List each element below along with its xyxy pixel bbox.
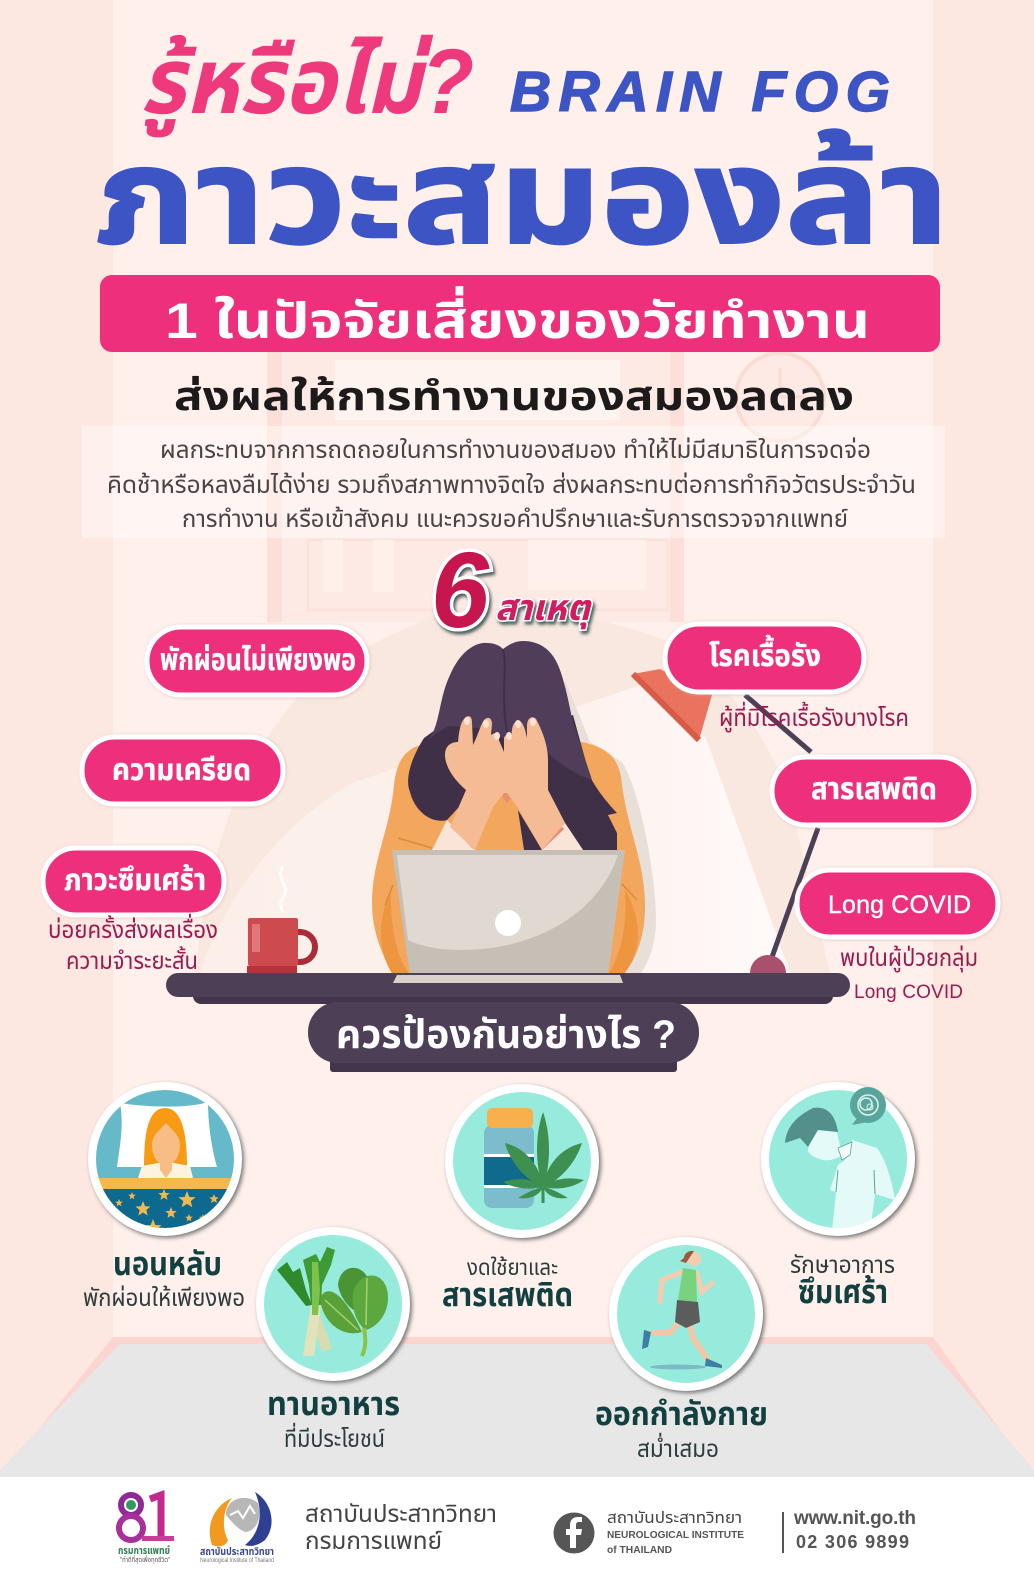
label: avoid drugs: งดใช้ยาและ [467, 1255, 558, 1280]
woman with head in hands [372, 641, 656, 975]
hair light [427, 641, 592, 780]
neck [497, 790, 520, 803]
desk lamp [633, 669, 818, 973]
label: avoid drugs [442, 1255, 573, 1313]
icon: vegetables [256, 1227, 412, 1383]
count badge: 6 causes [431, 529, 592, 650]
footer band [0, 1477, 1034, 1581]
woman shadow [560, 680, 656, 975]
pill: depression [43, 847, 226, 917]
label: sleep: พักผ่อนให้เพียงพอ [83, 1284, 245, 1312]
logo: department 81 years [118, 1495, 174, 1565]
pill: chronic disease: โรคเรื้อรัง [709, 634, 821, 673]
icon: runner [609, 1237, 765, 1393]
logo: neurological institute: สถาบันประสาทวิทยา [200, 1546, 274, 1558]
pill: not enough rest [147, 626, 369, 697]
left hand [445, 716, 504, 850]
footer: institute name [305, 1501, 497, 1555]
logo: department 81 years: กรมการแพทย์ [118, 1545, 170, 1557]
footer divider [782, 1512, 784, 1553]
pill: not enough rest: พักผ่อนไม่เพียงพอ [160, 644, 356, 677]
icon: sleeping woman [88, 1082, 244, 1239]
pill: long covid: Long COVID [828, 891, 971, 919]
label: exercise: ออกกำลังกาย [595, 1395, 768, 1432]
cuffs [432, 820, 475, 850]
footer: contact: 02 306 9899 [796, 1532, 909, 1552]
label: healthy food [267, 1385, 400, 1453]
explanation text block: คิดช้าหรือหลงลืมได้ง่าย รวมถึงสภาพทางจิตใจ ส่งผลกระทบต่อการทำกิจวัตรประจำวัน [107, 471, 916, 499]
finger nails [464, 717, 536, 740]
icon: drugs and cannabis [445, 1084, 601, 1240]
lamp light [200, 685, 790, 973]
note: long covid patients: Long COVID [854, 982, 963, 1003]
banner: working age risk: 1 ในปัจจัยเสี่ยงของวัยทำงาน [165, 286, 870, 349]
note: long covid patients: พบในผู้ป่วยกลุ่ม [840, 944, 978, 973]
label: exercise: สม่ำเสมอ [637, 1432, 719, 1463]
pill: stress [82, 736, 285, 806]
desk [166, 973, 850, 1004]
count badge: 6 causes: สาเหตุ [495, 587, 592, 630]
sweater [372, 742, 645, 975]
right hand [504, 717, 565, 850]
banner: working age risk [100, 275, 940, 352]
title: brain fog: BRAIN FOG [510, 60, 890, 124]
footer: institute name: สถาบันประสาทวิทยา [305, 1501, 497, 1528]
label: treat depression: รักษาอาการ [790, 1252, 895, 1279]
footer: facebook page name: of THAILAND [607, 1544, 672, 1556]
footer: institute name: กรมการแพทย์ [305, 1528, 442, 1555]
explanation text block [82, 426, 945, 538]
pill: depression: ภาวะซึมเศร้า [64, 864, 206, 897]
label: treat depression: ซึมเศร้า [798, 1273, 888, 1310]
pill: stress: ความเครียด [112, 754, 251, 787]
note: long covid patients [840, 944, 978, 1003]
pill: long covid [797, 869, 1000, 939]
background window and clock [267, 352, 824, 622]
laptop [392, 850, 625, 975]
label: healthy food: ที่มีประโยชน์ [284, 1422, 385, 1453]
note: short term memory: ความจำระยะสั้น [66, 945, 198, 975]
heading: how to prevent [308, 1002, 699, 1072]
logo: neurological institute: Neurological Institute of Thailand [200, 1558, 274, 1564]
label: healthy food: ทานอาหาร [267, 1385, 400, 1422]
label: sleep: นอนหลับ [113, 1245, 222, 1282]
pill: chronic disease [665, 623, 866, 694]
count badge: 6 causes: 6 [431, 529, 490, 650]
logo: department 81 years: "ทำดีที่สุดเพื่อทุกชีวิต" [120, 1554, 170, 1565]
label: treat depression [790, 1252, 895, 1310]
footer: facebook page name: สถาบันประสาทวิทยา [607, 1510, 742, 1527]
label: sleep [83, 1245, 245, 1312]
logo: neurological institute [200, 1492, 274, 1564]
icon: depressed man [761, 1082, 917, 1238]
title: know or not: รู้หรือไม่? [140, 31, 474, 138]
coffee cup with steam [247, 866, 315, 973]
label: exercise [595, 1395, 768, 1463]
note: short term memory [48, 913, 218, 975]
footer: contact [793, 1508, 916, 1552]
backdrop blob behind woman [196, 610, 830, 973]
explanation text block: การทำงาน หรือเข้าสังคม แนะควรขอคำปรึกษาและรับการตรวจจากแพทย์ [182, 506, 848, 533]
note: short term memory: บ่อยครั้งส่งผลเรื่อง [48, 913, 218, 944]
pill: substances [772, 756, 976, 827]
footer: facebook page name [607, 1510, 744, 1556]
note: some chronic diseases: ผู้ที่มีโรคเรื้อรังบางโรค [719, 701, 909, 733]
explanation text block: ผลกระทบจากการถดถอยในการทำงานของสมอง ทำให้ไม่มีสมาธิในการจดจ่อ [160, 436, 871, 464]
footer: facebook page name: NEUROLOGICAL INSTITUTE [607, 1529, 744, 1541]
hair dark [408, 712, 617, 850]
icon: facebook [554, 1512, 594, 1554]
subheading: ส่งผลให้การทำงานของสมองลดลง [174, 374, 854, 419]
label: avoid drugs: สารเสพติด [442, 1276, 573, 1313]
footer: contact: www.nit.go.th [793, 1508, 916, 1529]
heading: how to prevent: ควรป้องกันอย่างไร ? [336, 1012, 676, 1057]
pill: substances: สารเสพติด [811, 773, 937, 806]
main title: brain fatigue: ภาวะสมองล้า [95, 123, 949, 272]
